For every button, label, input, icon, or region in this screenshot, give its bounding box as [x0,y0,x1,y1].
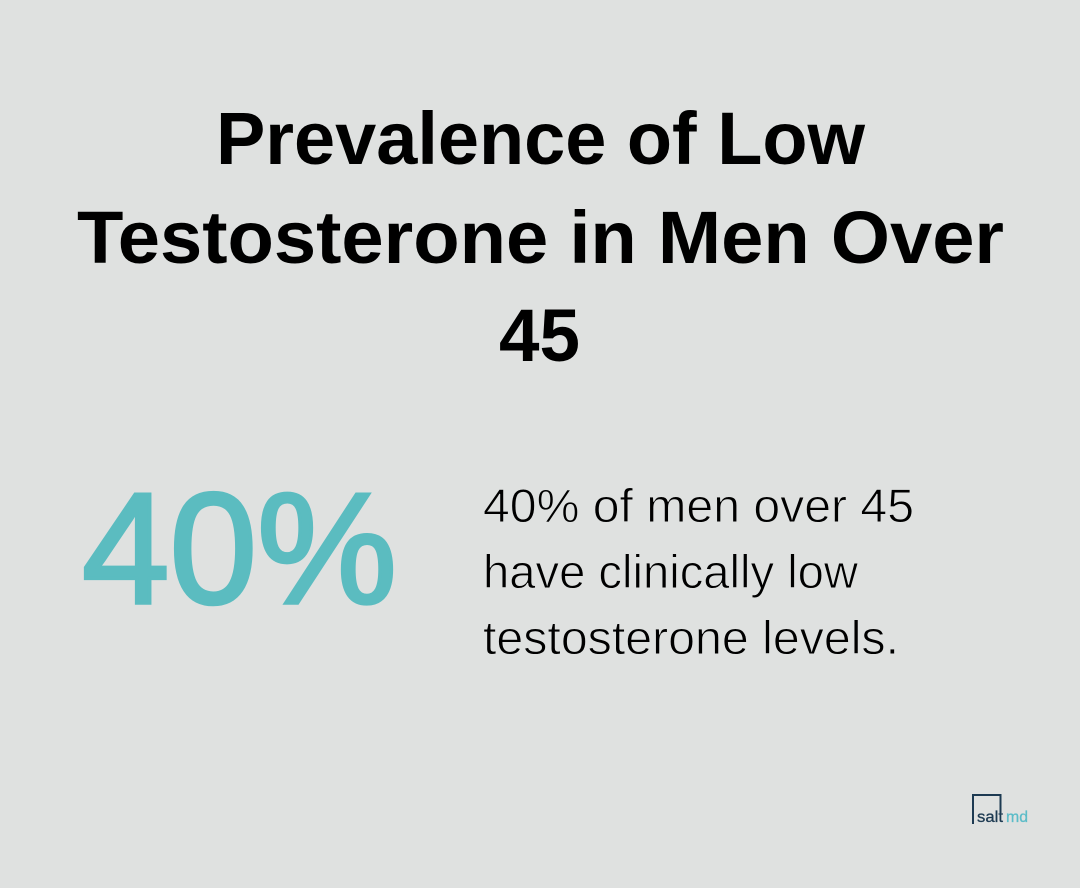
title: Testosterone in Men Over [77,196,1004,279]
description text: 40% of men over 45 [483,479,914,532]
description text: testosterone levels. [483,611,899,664]
description text [483,479,914,664]
big statistic: 40%: 40% [82,461,397,637]
title: 45 [499,294,580,377]
description text: have clinically low [483,545,859,598]
title [77,97,1004,377]
logo: saltmd: salt [977,809,1004,826]
logo: saltmd: md [1006,809,1028,826]
title: Prevalence of Low [216,97,865,180]
logo: saltmd [973,795,1028,826]
